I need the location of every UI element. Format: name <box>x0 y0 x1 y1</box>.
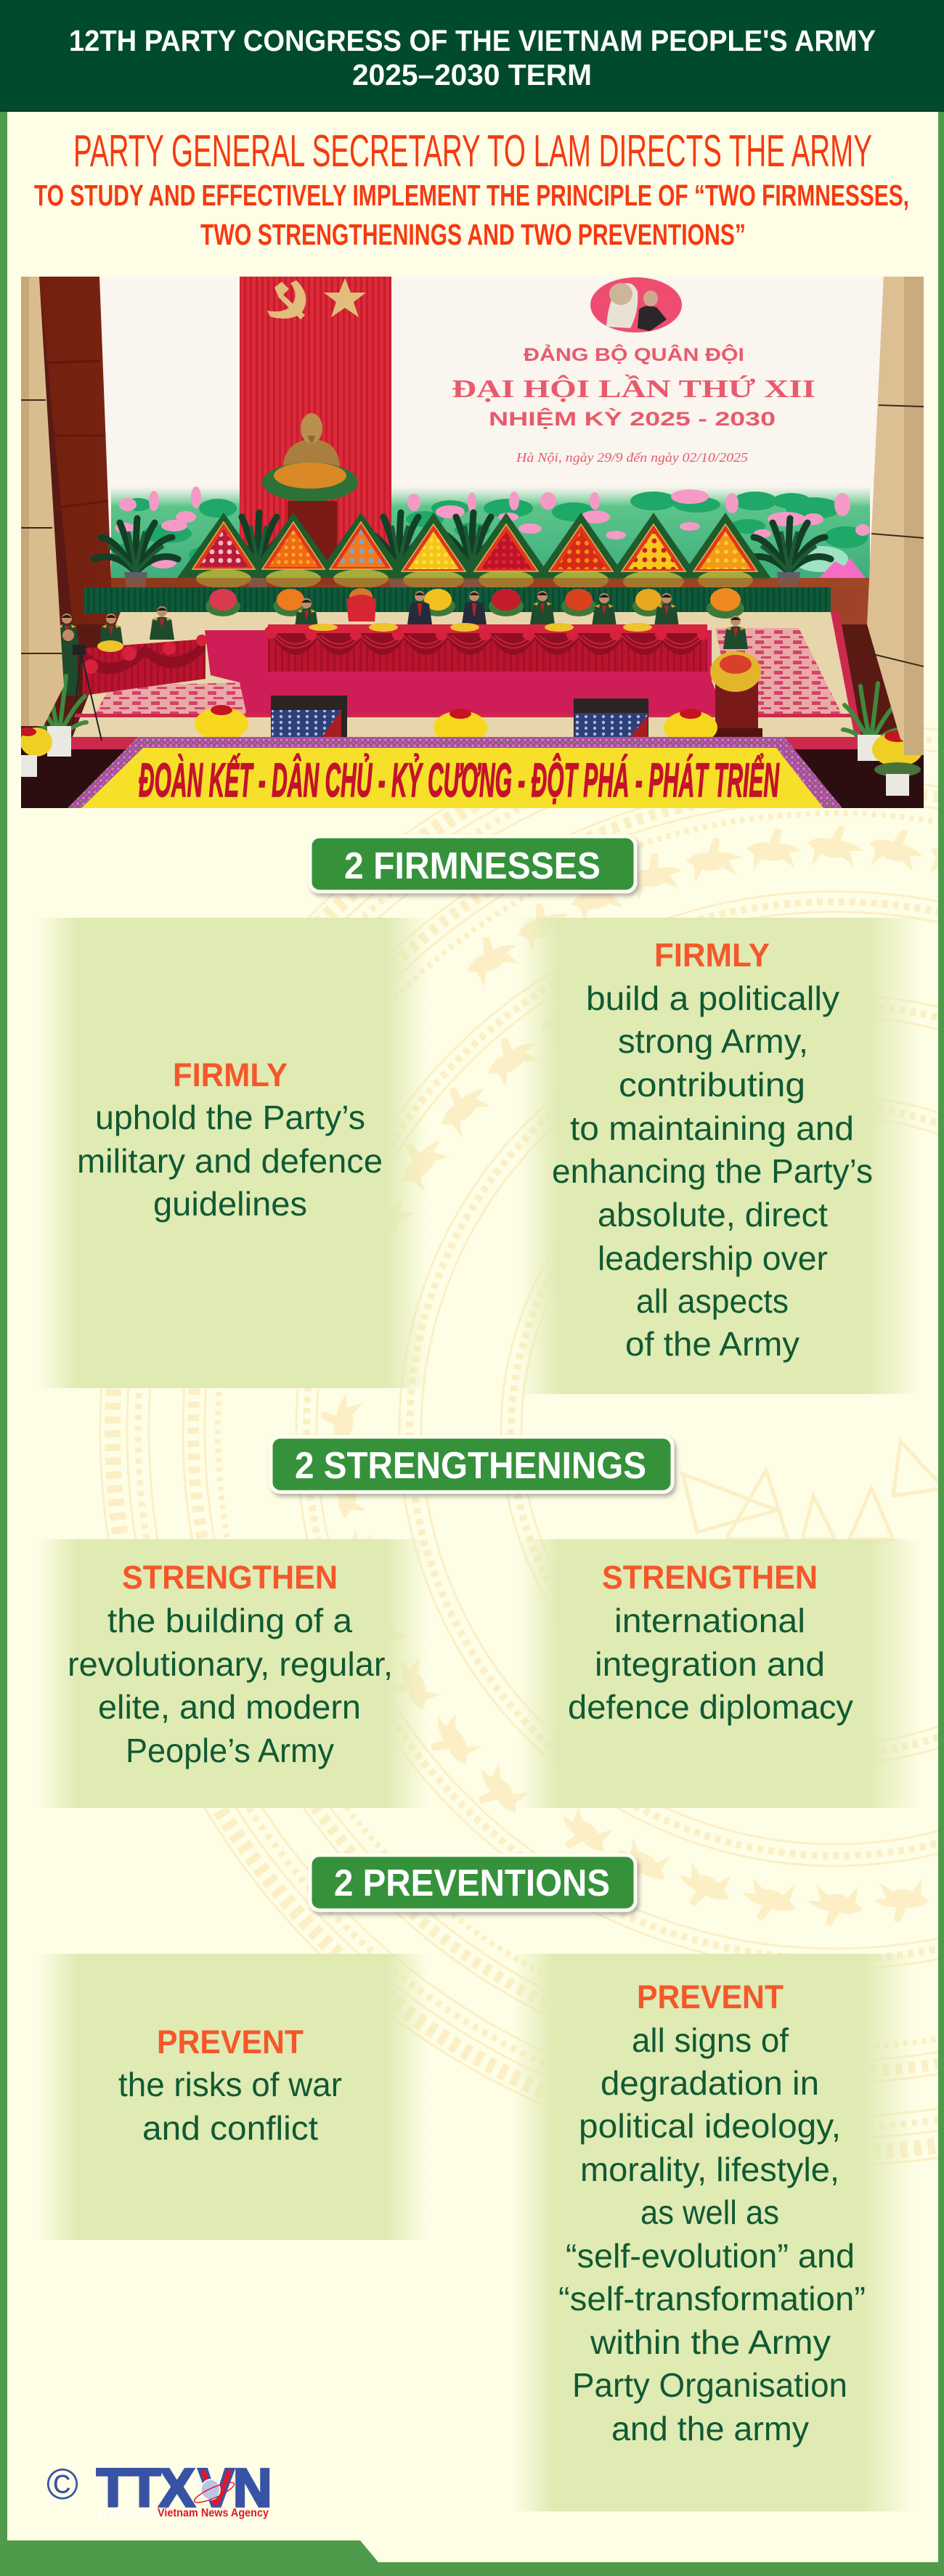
panel: firmly build <box>518 918 921 1394</box>
panel: firmly build: to maintaining and <box>570 1109 854 1147</box>
background bronze drum pattern <box>100 696 944 2165</box>
panel: firmly build: absolute, direct <box>598 1196 828 1234</box>
panel: firmly uphold: FIRMLY <box>173 1056 288 1093</box>
bust of Ho Chi Minh <box>283 413 340 466</box>
monitors <box>271 696 648 742</box>
delegates at main table <box>295 591 679 624</box>
pedestal <box>288 501 337 584</box>
panel: prevent war: PREVENT <box>157 2023 304 2061</box>
panel: prevent degradation: “self-evolution” and <box>566 2237 855 2275</box>
panel: prevent degradation: morality, lifestyle, <box>580 2151 839 2188</box>
panel: strengthen army building: STRENGTHEN <box>122 1559 338 1596</box>
podium flowers <box>262 462 358 502</box>
panel: firmly build: build a politically <box>586 979 839 1017</box>
star <box>324 278 366 317</box>
panel: prevent degradation: and the army <box>611 2410 809 2447</box>
panel: strengthen army building: elite, and modern <box>98 1688 361 1726</box>
panel: prevent degradation: political ideology, <box>579 2107 841 2145</box>
panel: strengthen integration <box>518 1539 921 1808</box>
panel: firmly uphold: uphold the Party’s <box>95 1099 365 1136</box>
left side delegates <box>54 606 174 647</box>
logo: TTXVN Vietnam News Agency: Infogra <box>98 2505 158 2521</box>
panel: prevent degradation: all signs of <box>632 2021 789 2059</box>
subheading <box>34 179 909 251</box>
screen <box>99 277 884 578</box>
panel: firmly build: FIRMLY <box>654 937 770 974</box>
speaker at lectern <box>710 616 762 737</box>
panel: strengthen army building: the building of a <box>107 1602 352 1639</box>
panel: prevent degradation: degradation in <box>601 2064 819 2102</box>
slogan flower banner <box>68 737 842 808</box>
logo: TTXVN Vietnam News Agency: Vietnam News Agency <box>158 2507 269 2519</box>
panel: prevent war: the risks of war <box>118 2066 342 2103</box>
portrait medallion <box>590 277 682 333</box>
panel: firmly build: contributing <box>619 1066 805 1104</box>
section pill: 2 STRENGTHENINGS <box>295 1445 646 1487</box>
panel: strengthen army building <box>36 1539 428 1808</box>
panel: firmly uphold: military and defence <box>77 1142 383 1180</box>
panel: strengthen integration: STRENGTHEN <box>602 1559 818 1596</box>
copyright mark: © <box>46 2460 78 2508</box>
panel: prevent degradation: “self-transformation” <box>558 2280 866 2318</box>
lower wall band <box>111 578 867 587</box>
panel: prevent degradation: as well as <box>640 2193 779 2231</box>
panel: strengthen integration: integration and <box>595 1645 825 1683</box>
panel: strengthen army building: revolutionary, regular, <box>68 1645 393 1683</box>
lotus backdrop <box>111 486 870 578</box>
panel: strengthen integration: defence diplomacy <box>568 1688 853 1726</box>
panel: prevent degradation: Party Organisation <box>572 2366 847 2404</box>
panel: prevent degradation: within the Army <box>590 2323 831 2361</box>
panel: firmly uphold <box>36 918 428 1388</box>
header title: 12TH PARTY CONGRESS OF THE VIETNAM PEOPLE'S ARMY <box>69 24 876 57</box>
screen text: Hà Nội, ngày 29/9 đến ngày 02/10/2025 <box>516 450 748 465</box>
plants and corner flowers <box>19 676 923 796</box>
panel: firmly build: all aspects <box>636 1282 789 1320</box>
section pill: 2 PREVENTIONS <box>334 1862 610 1904</box>
wood wall <box>39 277 900 624</box>
flower triangle stands <box>177 513 772 592</box>
logo: TTXVN Vietnam News Agency: TTXVN <box>97 2458 272 2518</box>
section pill: 2 FIRMNESSES <box>344 845 601 887</box>
left table <box>83 635 208 696</box>
panel: firmly build: of the Army <box>625 1325 799 1363</box>
panel: prevent war <box>36 1954 428 2240</box>
section: 2 strengthenings <box>36 1437 921 1808</box>
panel: strengthen army building: People’s Army <box>126 1732 334 1769</box>
subheading: TWO STRENGTHENINGS AND TWO PREVENTIONS” <box>200 218 746 251</box>
pillars <box>21 277 924 755</box>
standing officer with camera <box>60 629 102 741</box>
section pill <box>310 836 635 892</box>
photo: congress hall <box>19 277 924 808</box>
main table <box>264 623 709 672</box>
panel: prevent degradation: PREVENT <box>637 1978 784 2015</box>
header title <box>69 24 876 91</box>
screen text: ĐẢNG BỘ QUÂN ĐỘI <box>524 343 744 365</box>
stage steps <box>21 749 142 808</box>
panel: firmly build: enhancing the Party’s <box>552 1152 873 1190</box>
section: 2 preventions <box>36 1855 916 2511</box>
screen text: ĐẠI HỘI LẦN THỨ XII <box>452 374 815 403</box>
screen text <box>452 343 815 465</box>
section: 2 firmnesses <box>36 836 921 1394</box>
header title: 2025–2030 TERM <box>352 58 592 91</box>
panel: firmly uphold: guidelines <box>153 1185 307 1223</box>
panel: prevent war: and conflict <box>142 2109 318 2147</box>
panel: prevent degradation <box>512 1954 916 2511</box>
small floral stands <box>206 588 744 619</box>
panel: firmly build: leadership over <box>598 1239 828 1277</box>
green skirted platform <box>84 587 831 614</box>
flower balls <box>192 705 720 753</box>
header band <box>0 0 944 112</box>
carpet <box>64 612 864 749</box>
panel: strengthen integration: international <box>614 1602 805 1639</box>
screen text: NHIỆM KỲ 2025 - 2030 <box>489 407 776 430</box>
palm plants <box>94 518 178 594</box>
hammer and sickle <box>267 280 306 319</box>
red curtain <box>240 277 391 582</box>
panel: firmly build: strong Army, <box>618 1022 808 1060</box>
